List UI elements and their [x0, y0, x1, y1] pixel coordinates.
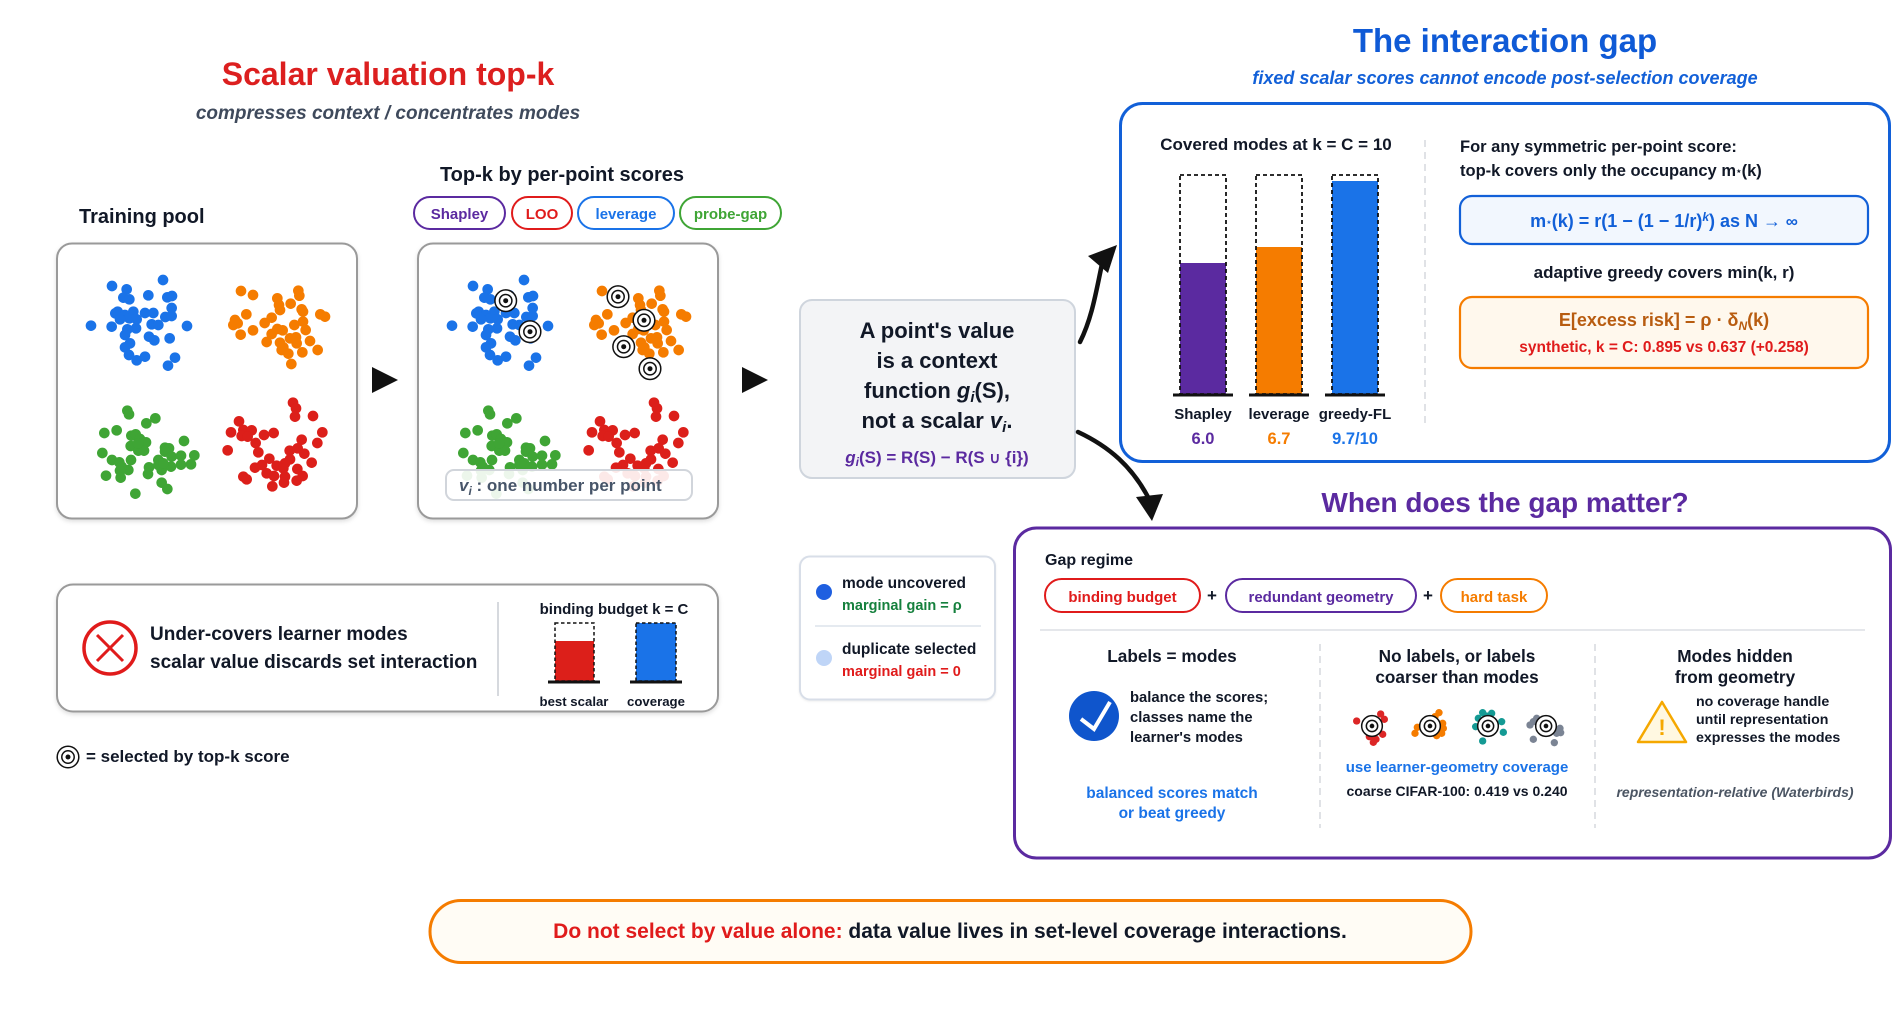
- column: labels = modes: classes name the: [1130, 710, 1253, 726]
- bar chart: covered modes: greedy-FL: [1319, 406, 1391, 423]
- heading: training pool: Training pool: [79, 206, 205, 228]
- mini chart: binding budget: binding budget k = C: [540, 601, 689, 618]
- column: labels = modes: balance the scores;: [1130, 690, 1268, 706]
- formula box: excess risk: synthetic, k = C: 0.895 vs 0.637 (+0.258): [1519, 339, 1809, 356]
- icon: warning triangle: !: [1658, 715, 1666, 740]
- heading: top-k by per-point scores: Top-k by per-point scores: [440, 164, 684, 186]
- legend panel: marginal gain: duplicate selected: [842, 641, 976, 658]
- formula box: occupancy: ) as N: [1709, 211, 1763, 231]
- icon: class-level target clusters: [1353, 709, 1564, 746]
- column: modes hidden: [1616, 646, 1854, 800]
- text: under-covers message: [150, 624, 477, 673]
- bar chart: covered modes: [1160, 135, 1392, 448]
- formula: g_i(S): (S) = R(S) − R(S: [859, 448, 989, 467]
- scatter: four clusters: [86, 275, 330, 499]
- column: modes hidden: representation-relative (Waterbirds): [1616, 784, 1854, 800]
- panel: gap regime: [1014, 528, 1890, 858]
- column: modes hidden: expresses the modes: [1696, 730, 1840, 746]
- column: modes hidden: Modes hidden: [1677, 646, 1793, 666]
- arrow: context to gap matter: [1078, 432, 1163, 521]
- formula box: excess risk: N: [1738, 319, 1747, 333]
- text: symmetric score claim: For any symmetric per-point score:: [1460, 138, 1737, 156]
- column: no labels: [1346, 646, 1568, 799]
- panel: context function: is a context: [876, 348, 998, 373]
- bar chart: covered modes: 6.7: [1268, 430, 1290, 448]
- formula: g_i(S): ∪ {i}): [989, 448, 1029, 467]
- mini chart: binding budget: best scalar: [540, 694, 608, 709]
- icon: blue check: [1069, 691, 1119, 741]
- panel: interaction gap: [1120, 104, 1890, 462]
- bar chart: covered modes: leverage: [1249, 406, 1309, 423]
- column: labels = modes: [1069, 646, 1268, 822]
- formula box: occupancy: [1460, 196, 1868, 244]
- legend panel: marginal gain: mode uncovered: [842, 575, 966, 592]
- panel: context function: not a scalar v: [862, 408, 1002, 433]
- regime pills: hard task: [1461, 589, 1528, 606]
- mini chart: binding budget: [540, 601, 689, 709]
- icon: warning triangle: [1638, 702, 1686, 742]
- legend: selected by top-k score: = selected by top-k score: [86, 747, 290, 766]
- arrow: pool to top-k: [372, 367, 398, 393]
- panel: context function: [800, 300, 1075, 478]
- column: labels = modes: Labels = modes: [1107, 646, 1237, 666]
- legend panel: marginal gain: marginal gain = ρ: [842, 598, 962, 614]
- panel: context function: i: [970, 389, 975, 406]
- mini chart: binding budget: coverage: [627, 694, 685, 709]
- heading: gap regime: Gap regime: [1045, 552, 1133, 569]
- column: no labels: use learner-geometry coverage: [1346, 759, 1568, 776]
- scatter: four clusters with selection: [447, 275, 691, 499]
- formula: g_i(S): g: [844, 448, 856, 467]
- arrow: top-k to context box: [742, 367, 768, 393]
- formula box: occupancy: ⋆: [1546, 217, 1552, 227]
- callout: one number per point: [446, 470, 692, 500]
- formula: g_i(S): i: [856, 455, 860, 469]
- panel: context function: i: [1002, 419, 1007, 436]
- formula box: occupancy: m: [1530, 211, 1546, 231]
- column: modes hidden: no coverage handle: [1696, 694, 1829, 710]
- score method pills: Shapley: [431, 206, 489, 223]
- title: the interaction gap: The interaction gap: [1353, 22, 1657, 59]
- regime pills: [1045, 579, 1547, 612]
- callout: one number per point: i: [468, 484, 472, 498]
- text: symmetric score claim: [1460, 138, 1762, 180]
- column: labels = modes: or beat greedy: [1119, 805, 1226, 822]
- regime pills: +: [1423, 586, 1433, 605]
- bar chart: covered modes: 6.0: [1192, 430, 1214, 448]
- column: no labels: coarse CIFAR-100: 0.419 vs 0.240: [1346, 783, 1568, 799]
- icon: red cross: [84, 622, 136, 674]
- bar chart: covered modes: 9.7/10: [1332, 430, 1378, 448]
- score method pills: leverage: [596, 206, 656, 223]
- column: modes hidden: from geometry: [1675, 667, 1796, 687]
- score method pills: probe-gap: [694, 206, 767, 223]
- text: under-covers message: scalar value discards set interaction: [150, 652, 477, 673]
- column: labels = modes: balanced scores match: [1086, 785, 1258, 802]
- title: when does the gap matter: When does the gap matter?: [1321, 487, 1689, 518]
- text: under-covers message: Under-covers learner modes: [150, 624, 408, 645]
- score method pills: [414, 197, 781, 229]
- arrow: context to interaction gap: [1080, 245, 1117, 342]
- bar chart: covered modes: Shapley: [1174, 406, 1232, 423]
- panel: training pool: [57, 244, 357, 518]
- title: scalar valuation top-k: Scalar valuation top-k: [222, 56, 554, 92]
- column: modes hidden: until representation: [1696, 712, 1828, 728]
- column: no labels: No labels, or labels: [1379, 646, 1535, 666]
- column: labels = modes: learner's modes: [1130, 730, 1243, 746]
- legend panel: marginal gain: [800, 556, 995, 700]
- bar chart: covered modes: Covered modes at k = C = 10: [1160, 135, 1392, 154]
- formula box: excess risk: [1460, 297, 1868, 368]
- regime pills: redundant geometry: [1248, 589, 1394, 606]
- banner: takeaway: [430, 900, 1471, 962]
- panel: context function: (S),: [975, 378, 1010, 403]
- legend panel: marginal gain: marginal gain = 0: [842, 664, 961, 680]
- subtitle: fixed scalar scores: fixed scalar scores cannot encode post-selection coverage: [1252, 68, 1758, 88]
- formula box: occupancy: k: [1702, 210, 1710, 224]
- formula box: excess risk: (k): [1747, 310, 1769, 330]
- panel: context function: function g: [864, 378, 970, 403]
- text: symmetric score claim: ⋆: [1736, 166, 1742, 176]
- callout: one number per point: v: [459, 476, 470, 495]
- subtitle: compresses context: compresses context / concentrates modes: [196, 103, 580, 124]
- panel: context function: A point's value: [860, 318, 1014, 343]
- panel: top-k selected: [418, 244, 718, 518]
- text: symmetric score claim: (k): [1742, 162, 1762, 180]
- banner: takeaway: Do not select by value alone: data value lives in set-level coverage interactions.: [553, 920, 1347, 943]
- icon: selected targets: [495, 286, 661, 380]
- formula box: occupancy: → ∞: [1763, 211, 1798, 231]
- regime pills: +: [1207, 586, 1217, 605]
- callout: one number per point: : one number per point: [472, 476, 662, 495]
- formula box: excess risk: E[excess risk] = ρ · δ: [1559, 310, 1738, 330]
- column: no labels: coarser than modes: [1375, 667, 1539, 687]
- text: adaptive greedy: adaptive greedy covers min(k, r): [1534, 263, 1794, 282]
- regime pills: binding budget: [1068, 589, 1177, 606]
- score method pills: LOO: [526, 206, 559, 223]
- text: symmetric score claim: top-k covers only the occupancy m: [1460, 162, 1736, 180]
- formula box: occupancy: (k) = r(1 − (1 − 1/r): [1552, 211, 1702, 231]
- panel: context function: .: [1006, 408, 1012, 433]
- panel: under-covers learner modes: [57, 584, 718, 712]
